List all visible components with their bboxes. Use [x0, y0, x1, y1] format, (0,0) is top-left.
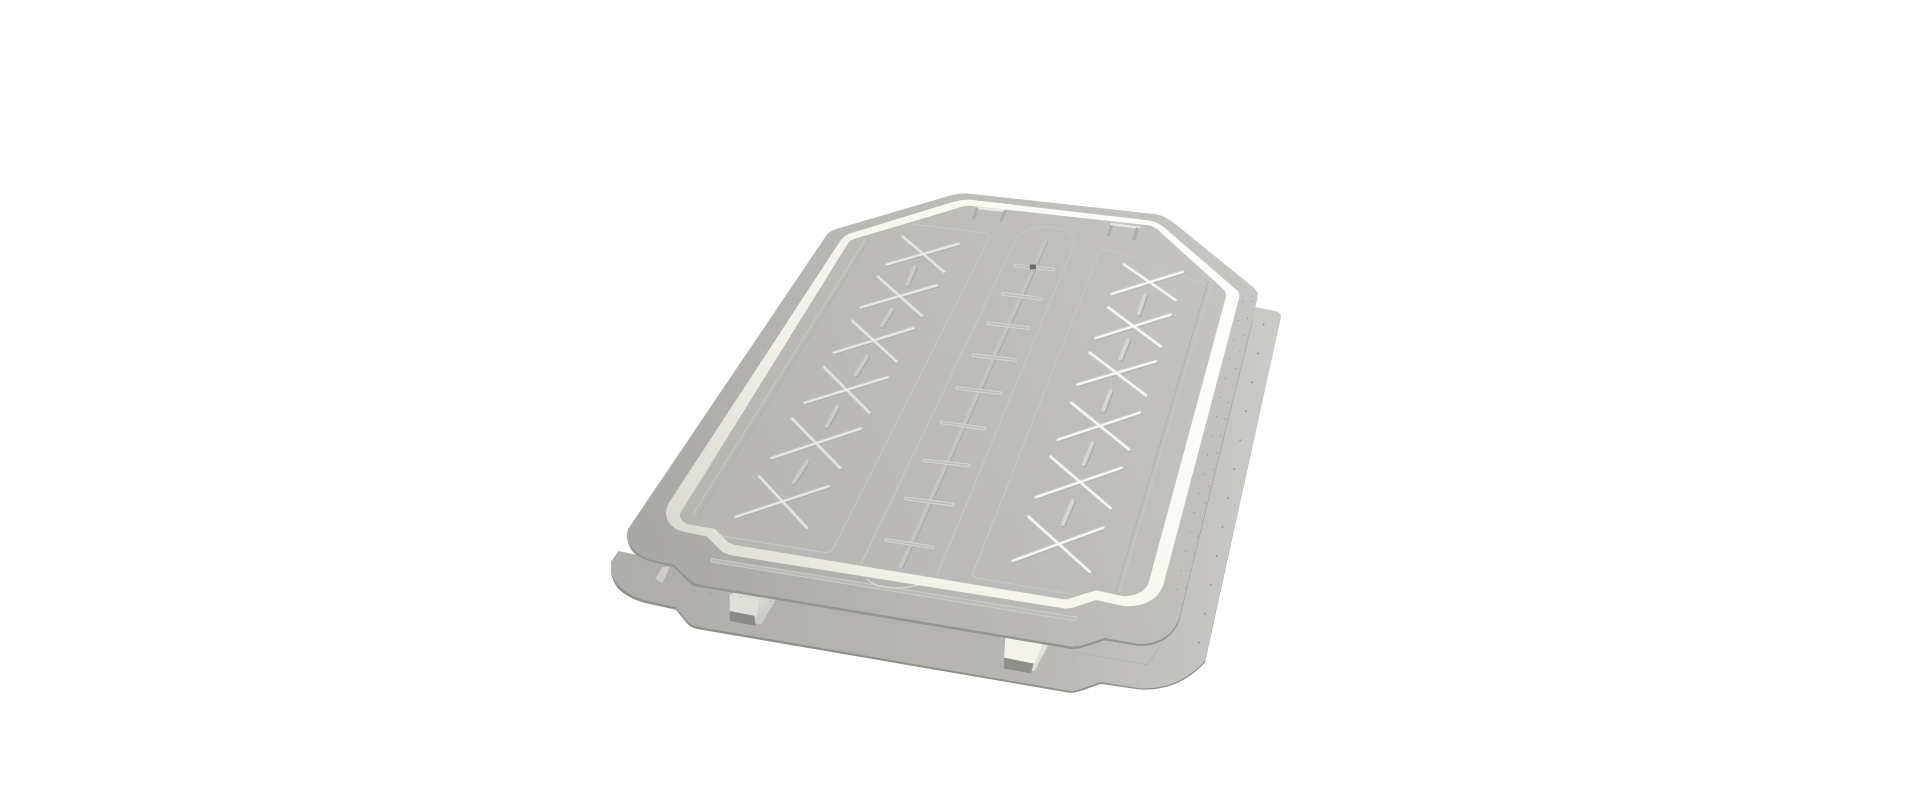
left column cross bars [736, 236, 960, 529]
back plate right edge crease [1071, 321, 1253, 665]
middle plate edge dots [634, 200, 1251, 645]
back plate mounting dots [1196, 324, 1264, 655]
right panel outline [973, 250, 1212, 595]
bottom centre arc [867, 579, 918, 588]
inner plate field [672, 203, 1235, 604]
foot: left [730, 593, 778, 626]
bottom long slot [711, 558, 1076, 621]
centre rungs [887, 266, 1053, 547]
foot: right [1004, 637, 1049, 673]
centre spine [900, 240, 1046, 568]
back plate [611, 306, 1281, 693]
left panel outline [693, 224, 989, 552]
centre dark notch [1030, 264, 1036, 269]
middle plate [627, 193, 1258, 649]
top tabs [973, 208, 1140, 240]
sealing ring [666, 200, 1239, 609]
back plate left tab [655, 567, 670, 583]
right column cross bars [1013, 264, 1184, 573]
centre channel outline [861, 227, 1074, 576]
